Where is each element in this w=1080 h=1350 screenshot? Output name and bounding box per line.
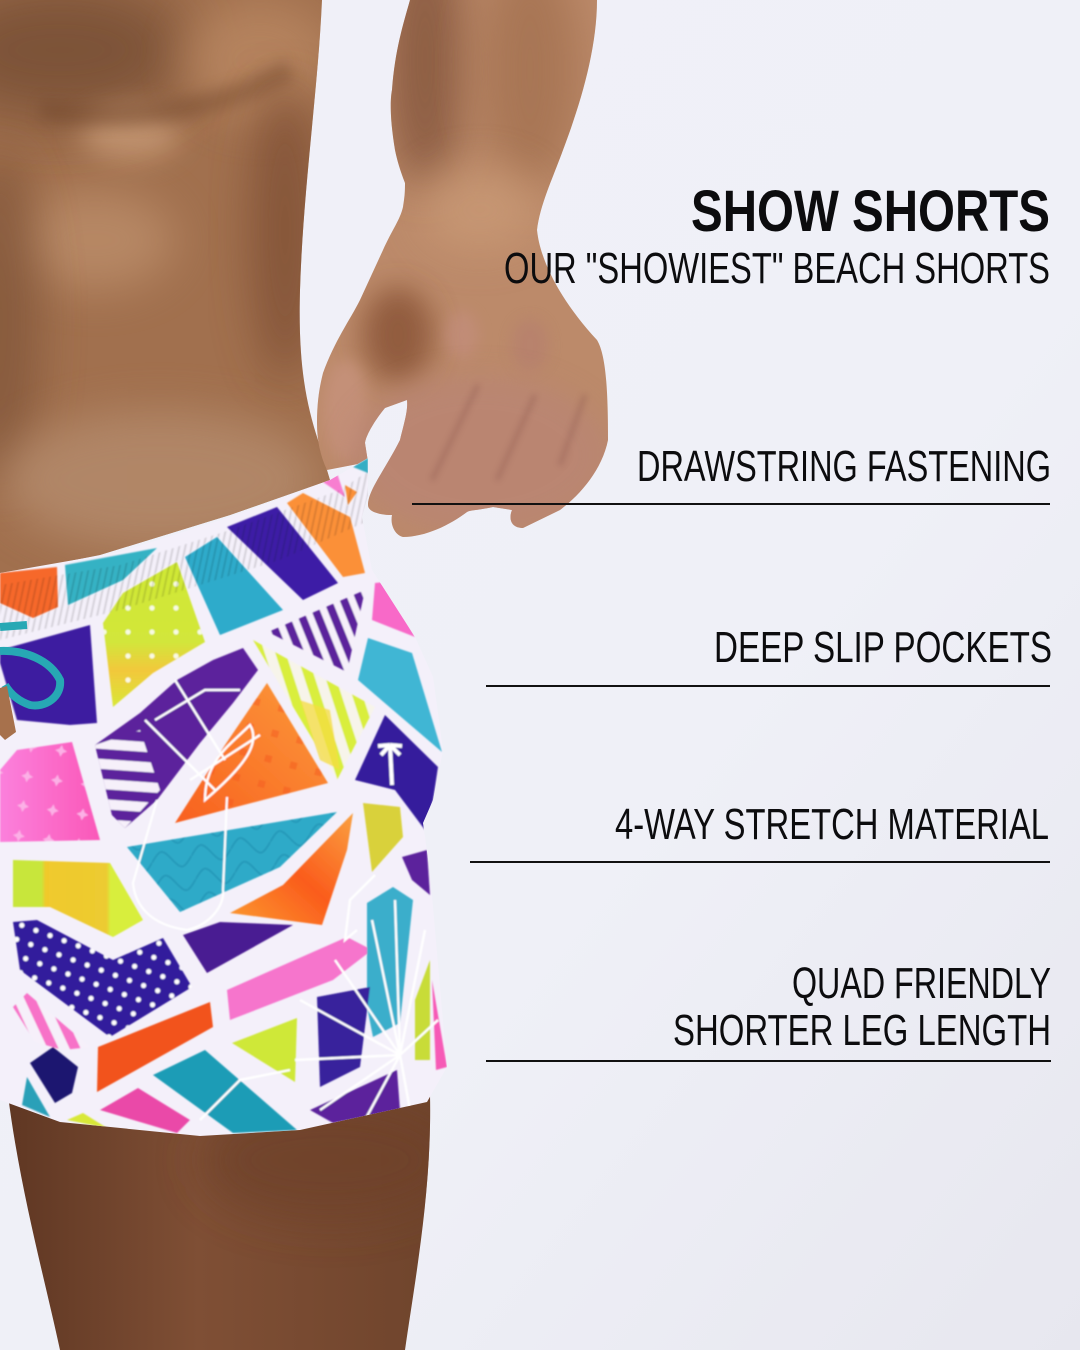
shorts base <box>0 458 447 1136</box>
purple panel <box>183 922 293 973</box>
yellow panel <box>363 803 403 872</box>
multi colour panel <box>13 860 143 937</box>
pink wave panel <box>227 937 372 1020</box>
orange panel <box>230 813 353 925</box>
front panels <box>103 562 205 707</box>
arm and hand <box>317 0 608 537</box>
waistband patches <box>0 567 58 618</box>
teal wave panel <box>127 812 337 912</box>
title block <box>504 179 1050 293</box>
dark palm patch <box>355 715 438 830</box>
pocket drawcord loops <box>133 797 227 930</box>
thigh <box>9 1096 430 1350</box>
orange citrus panel <box>175 683 328 823</box>
feature: quad friendly shorter leg length <box>486 959 1051 1061</box>
drawstring <box>0 625 60 705</box>
pink panel <box>0 742 100 842</box>
waistband gathers <box>0 470 370 640</box>
drawstring tip <box>0 686 16 740</box>
right side palm panels <box>367 887 413 1037</box>
swim shorts with colourful geometric print <box>0 458 447 1136</box>
model photo: torso, arm and leg <box>0 0 620 1350</box>
white palm line art <box>145 680 438 1120</box>
palm icon <box>378 745 402 785</box>
blue dotted panel <box>13 920 192 1037</box>
lower panels <box>12 992 81 1050</box>
purple panel with stripes <box>95 648 258 828</box>
torso <box>0 0 340 580</box>
